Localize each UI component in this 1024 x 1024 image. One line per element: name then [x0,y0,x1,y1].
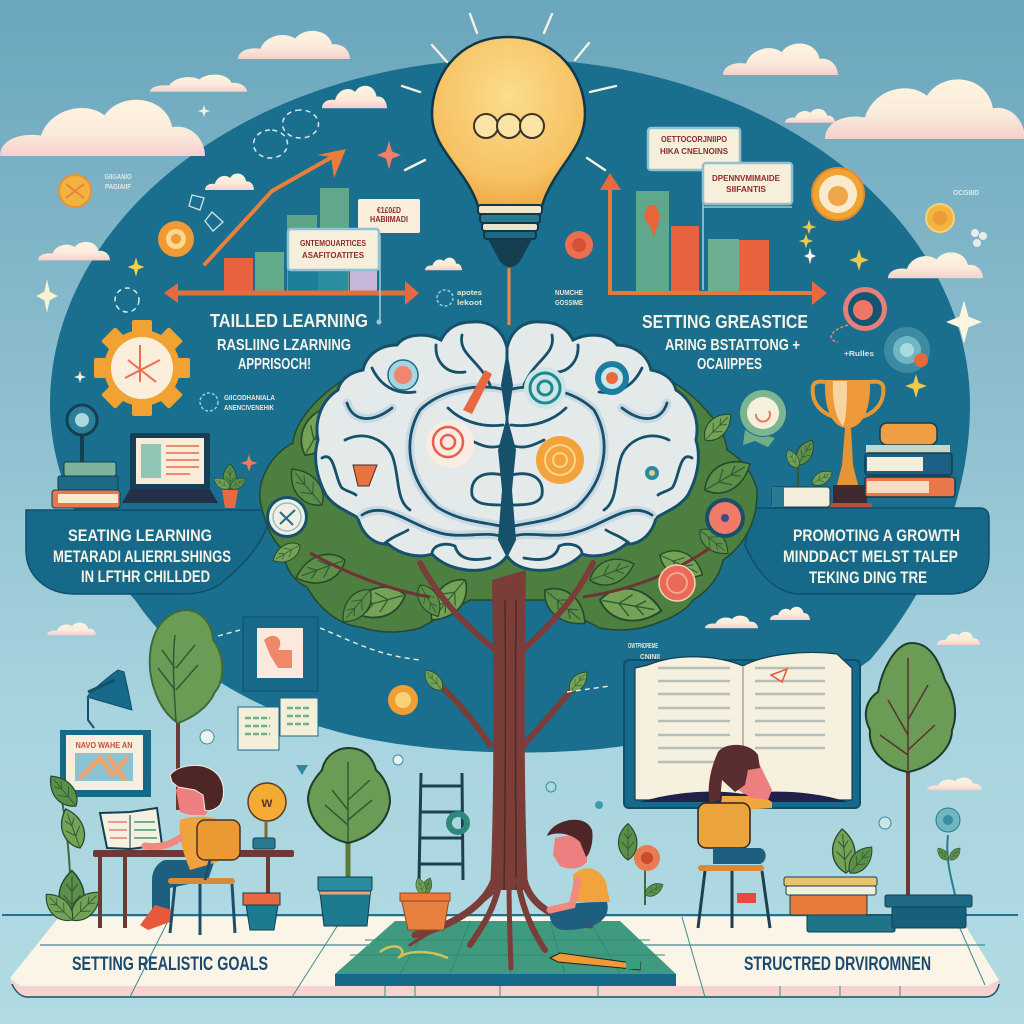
illustration: left leaf tree [150,610,222,810]
icon: book stack [865,423,955,497]
icon: coin mid left [388,685,418,715]
caption: center right: NUMCHE [555,290,583,297]
icon: brain swirl orange [536,436,584,484]
chart: right bar chart [600,128,827,305]
bar: green short [255,252,284,291]
illustration: large open book [624,652,860,808]
banner text: METARADI ALIERRLSHINGS [53,547,231,566]
icon cluster: right coins and gears [739,168,987,508]
illustration: tree roots [410,880,590,968]
caption: below crown right: CNINII [640,654,660,661]
panel: left banner [26,510,272,594]
icon: small center gear [565,231,593,259]
illustration: flower plant [619,824,666,905]
icon: small gear stand [67,405,97,462]
heading: tailored learning: APPRISOCH! [238,356,311,373]
illustration: reading girl with chair [698,745,772,928]
banner text [783,526,960,587]
sign: document notes [238,698,318,750]
icon: red gear [831,287,887,342]
heading: setting greater [642,312,808,373]
caption: center right: GOSSIME [555,300,583,307]
illustration: ladder [419,773,467,880]
chart: right bar chart: HIKA CNELNOINS [660,147,729,156]
chart: left bar chart with arrows: HABIIMADI [370,215,408,224]
arrow: horizontal axis [172,290,410,296]
bar: red [224,258,253,291]
caption: below crown right: OWTFNDREME [628,643,658,650]
decorative bubbles [200,730,891,829]
caption: rules: +Rulles [844,351,874,358]
icon: trophy [813,380,883,508]
glass [432,37,585,206]
stem [508,268,510,325]
illustration: tree trunk and branches [420,563,593,890]
illustration: left reading child at desk [40,765,294,935]
icon: pencil [550,953,640,970]
left small plant [40,770,106,927]
icon: crown coin right [705,498,745,538]
banner text: TEKING DING TRE [809,568,927,587]
icon: small plant [772,437,835,507]
panel: large teal circle [50,59,970,753]
rays [402,14,616,170]
banner text: MINDDACT MELST TALEP [783,547,958,566]
illustration: small potted plant [400,876,450,930]
label: left floor: SETTING REALISTIC GOALS [72,954,268,975]
label: right floor: STRUCTRED DRVIROMNEN [744,954,931,975]
heading: tailored learning: RASLIING LZARNING [217,337,351,354]
illustration: green mat [335,921,676,986]
bar: green tall [636,191,669,291]
caption: coin: GIIGANIO [104,174,132,181]
filament [474,114,544,138]
open book on desk [100,808,162,849]
icon: desk lamp [87,670,132,728]
icon: crown coin lower [659,565,695,601]
torso [720,796,772,810]
icon cluster: left gears and coins [59,174,593,416]
bar: red [739,240,769,291]
illustration: sitting child [547,820,610,930]
icon: light bulb [402,14,616,325]
pants and shoe [140,860,215,930]
bar: purple [350,268,377,291]
sign: upper note [648,128,740,170]
sign: map picture [60,730,151,797]
child torso and head [145,765,224,870]
chair [698,803,770,928]
heading: setting greater: OCAIIPPES [697,356,762,373]
icon: book stack [52,462,120,508]
icon: small coin [926,204,954,232]
caption: approach note: GIICODHANIALA [224,395,275,402]
icon: big coin [812,168,864,220]
illustration: right book stacks [784,877,972,932]
pot [243,893,280,930]
chart: left bar chart with arrows: €1£0£D [377,206,401,215]
chart: left bar chart with arrows [164,149,420,324]
icon: badge [739,389,787,447]
bar: green tall [320,188,349,291]
heading: tailored learning: TAILLED LEARNING [210,311,368,331]
bar: red [671,226,699,291]
icon: dot cluster [971,229,987,247]
panel: right banner [745,508,989,594]
hair [709,745,760,803]
pot [318,877,372,926]
heading: tailored learning [210,311,368,373]
caption: center left [437,290,483,307]
illustration: brain [316,322,698,570]
banner text: PROMOTING A GROWTH [793,526,960,545]
decorative sparkles [36,105,982,471]
caption: below crown right [628,643,660,661]
sign: small note [358,199,420,233]
side branches [310,548,710,597]
heading: setting greater: SETTING GREASTICE [642,312,808,332]
caption: coin: PAGIAIIF [105,184,132,191]
icon: small flower stand [935,808,963,895]
shoe [737,893,756,903]
arrow: axes [610,190,812,293]
arrow: rising trend [205,157,332,264]
illustration: tree crown [260,380,757,633]
bar: green [708,239,739,291]
icon: flower coin [158,221,194,257]
floor platform [2,915,1018,997]
caption: center left: apotes [457,290,482,297]
caption: approach note: ANENCIVENEHIK [224,405,274,412]
icon: laptop [122,433,218,503]
sign: map picture: NAVO WAHE AN [76,741,133,750]
icon: brain marker blue [595,361,629,395]
sign: framed picture [243,617,318,691]
icon: flag [353,465,377,486]
icon: brain marker pink [388,360,418,390]
icon: potted plant [212,464,248,508]
desk bulb [248,783,286,849]
icon: yellow scribble [380,946,448,958]
icon: crown coin left [266,496,308,538]
bar: green mid [287,215,317,291]
chart: right bar chart: SIIFANTIS [726,185,767,194]
illustration: potted tree [308,748,390,926]
banner text [53,526,231,586]
icon: paint brush [463,370,492,414]
chair [168,820,240,935]
banner text: IN LFTHR CHILLDED [81,567,210,586]
icon: brain swirl pink [426,420,474,468]
caption: center right [555,290,583,307]
caption: coin: OCGIIID [953,190,979,197]
chart: right bar chart: OETTOCORJNIIPO [661,135,727,144]
chart: left bar chart with arrows: GNTEMOUARTICES [300,239,367,248]
banner text: SEATING LEARNING [68,526,212,545]
icon: large gear [94,320,190,416]
icon: brain marker small [645,466,659,480]
illustration: right tree [866,643,955,897]
icon: blue gear [884,327,930,373]
heading: setting greater: ARING BSTATTONG + [665,337,800,354]
caption: center left: lekoot [457,300,483,307]
icon: orange coin [59,175,91,207]
desk bulb: w [261,794,273,810]
icon: brain swirl teal [524,367,566,409]
chart: right bar chart: DPENNVMIMAIDE [712,174,781,183]
clouds [0,31,1024,790]
caption: coin [104,174,132,191]
sign: lower note [703,163,792,204]
sign: main note [288,229,379,270]
decorative wall marks [218,628,610,692]
face and hand [738,765,772,800]
desk [93,850,294,928]
caption: approach note [200,393,275,412]
icon cluster: left laptop and books [52,405,248,508]
screw base [478,205,542,214]
chart: left bar chart with arrows: ASAFITOATITES [302,251,365,260]
illustration: small leafy plant [831,828,878,878]
